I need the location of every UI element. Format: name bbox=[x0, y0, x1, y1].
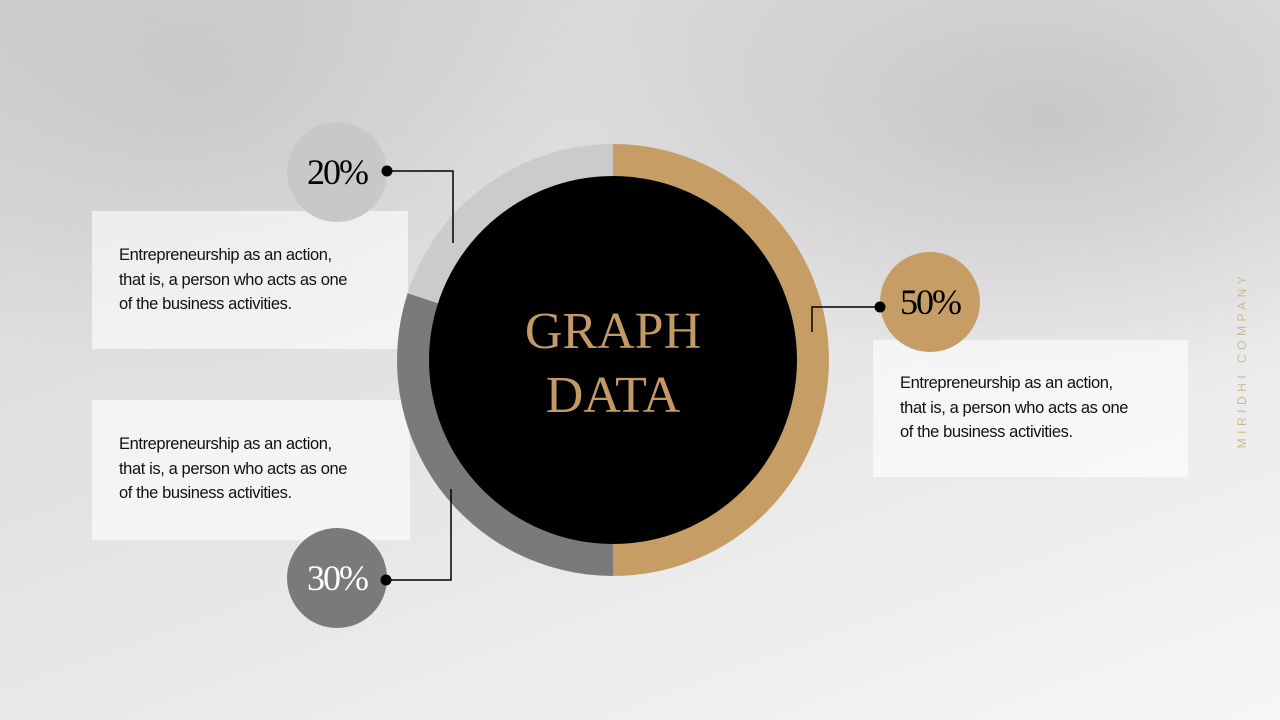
badge: 30%: 30% bbox=[307, 558, 367, 598]
text: right description: that is, a person who acts as one bbox=[900, 398, 1128, 416]
text box: bottom left bbox=[92, 400, 410, 540]
title: GRAPH DATA: DATA bbox=[546, 367, 680, 424]
text: bottom left description bbox=[119, 435, 347, 502]
text: top left description: that is, a person who acts as one bbox=[119, 270, 347, 288]
badge: 30% bbox=[287, 528, 387, 628]
title: GRAPH DATA bbox=[525, 303, 701, 424]
text box: right bbox=[873, 340, 1188, 477]
text: right description: Entrepreneurship as an action, bbox=[900, 374, 1113, 392]
connector: 20% bbox=[382, 166, 453, 243]
badge: 50%: 50% bbox=[900, 282, 960, 322]
text box: top left bbox=[92, 211, 408, 349]
title: GRAPH DATA: GRAPH bbox=[525, 303, 701, 360]
text: right description: of the business activities. bbox=[900, 423, 1073, 441]
text: top left description: Entrepreneurship as an action, bbox=[119, 246, 332, 264]
badge: 50% bbox=[880, 252, 980, 352]
connector: 30% bbox=[380, 489, 451, 586]
vertical brand text: MIRIDHI COMPANY bbox=[1235, 272, 1249, 448]
text: top left description: of the business activities. bbox=[119, 295, 292, 313]
text: bottom left description: that is, a person who acts as one bbox=[119, 460, 347, 478]
text: bottom left description: of the business activities. bbox=[119, 484, 292, 502]
connector: 50% bbox=[812, 302, 886, 332]
text: bottom left description: Entrepreneurship as an action, bbox=[119, 435, 332, 453]
text: right description bbox=[900, 374, 1128, 441]
badge: 20% bbox=[287, 122, 387, 222]
text: top left description bbox=[119, 246, 347, 313]
badge: 20%: 20% bbox=[307, 152, 367, 192]
